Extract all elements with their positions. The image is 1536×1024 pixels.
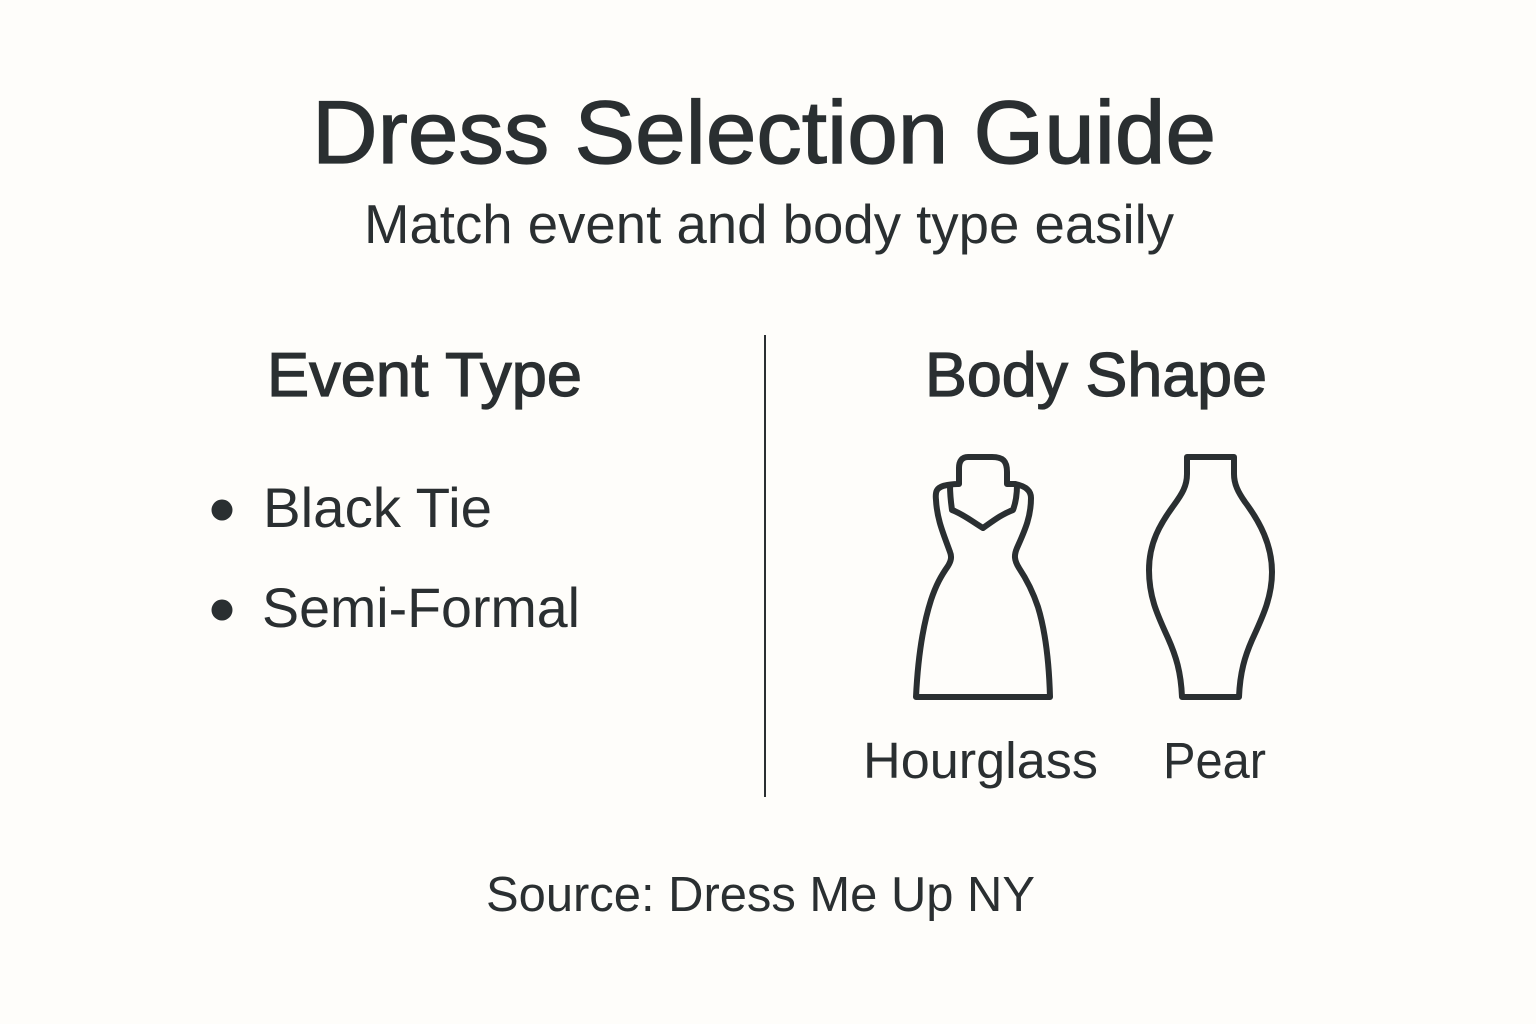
vertical divider xyxy=(764,335,766,797)
heading: event type: Event Type xyxy=(267,341,582,410)
panel: event type xyxy=(212,341,582,639)
icon: pear shape xyxy=(1149,457,1272,697)
panel: body shape xyxy=(863,341,1272,789)
label: hourglass: Hourglass xyxy=(863,732,1098,789)
title: Dress Selection Guide xyxy=(312,82,1216,182)
source note: Source: Dress Me Up NY xyxy=(486,868,1035,922)
icon: hourglass dress xyxy=(916,457,1050,697)
heading: body shape: Body Shape xyxy=(925,341,1267,410)
subtitle: Match event and body type easily xyxy=(364,193,1174,255)
label: pear: Pear xyxy=(1163,732,1266,789)
list item: semi-formal: Semi-Formal xyxy=(262,576,580,639)
list item: black tie: Black Tie xyxy=(263,476,492,539)
